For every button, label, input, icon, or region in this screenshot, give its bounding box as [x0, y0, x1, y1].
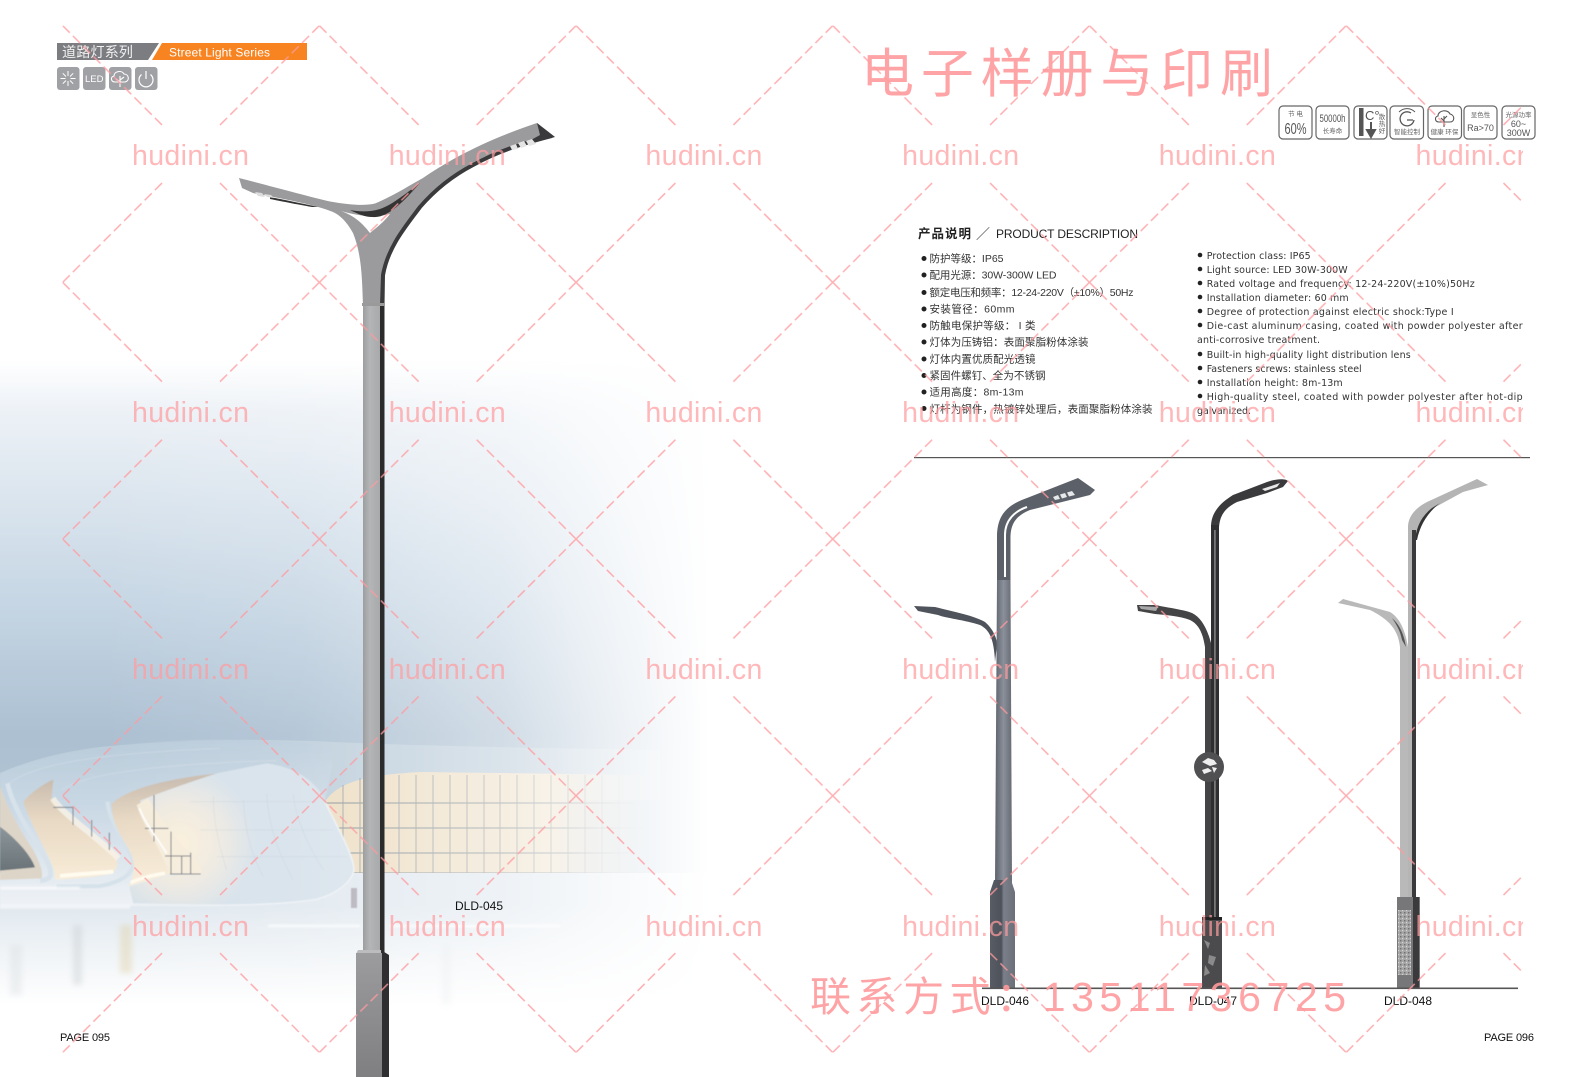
icon: energy saving 60%: 60%: [1284, 121, 1306, 138]
icon: smart control: [1390, 106, 1424, 139]
watermark text grid: hudini.cn: [645, 140, 762, 172]
icon: heat dissipation: 热: [1379, 119, 1386, 128]
wave A ribbon: [7, 783, 51, 881]
performance icons right: [1279, 106, 1535, 139]
English specifications list: Rated voltage and frequency: 12-24-220V(±10%)50Hz: [1207, 279, 1475, 290]
Chinese specifications list: 紧固件螺钉、全为不锈钢: [930, 369, 1046, 382]
watermark text grid: hudini.cn: [645, 654, 762, 686]
Chinese specifications list: 防触电保护等级： I 类: [930, 319, 1036, 332]
building mass: [0, 740, 354, 906]
side arm shadow: [1392, 618, 1406, 647]
English specifications list: High-quality steel, coated with powder polyester after hot-dip: [1207, 392, 1523, 403]
watermark text grid: hudini.cn: [1416, 911, 1532, 943]
warm glow on wave C: [129, 773, 273, 905]
product description heading: [918, 226, 1138, 242]
English specifications list: Degree of protection against electric shock:Type I: [1207, 307, 1454, 318]
watermark text grid: hudini.cn: [132, 654, 249, 686]
icon: power: [135, 67, 158, 90]
icon: healthy and green: [1428, 106, 1462, 139]
icon: heat dissipation: C°: [1365, 108, 1380, 123]
model labels: [455, 899, 1432, 1008]
watermark text grid: hudini.cn: [132, 140, 249, 172]
main arm and head: [997, 478, 1095, 600]
product description heading: ／: [976, 226, 990, 242]
icon: light source power: [1502, 106, 1535, 139]
model labels: DLD-046: [981, 994, 1029, 1008]
pole base: [356, 950, 389, 1077]
Chinese specifications list: 防护等级：IP65: [930, 252, 1004, 265]
main lamp DLD-045: [239, 123, 555, 1077]
panel lines: [190, 793, 347, 880]
watermark text grid: hudini.cn: [389, 654, 506, 686]
left cream column: [0, 785, 42, 880]
Chinese specifications list: 灯杆为钢件，热镀锌处理后，表面聚脂粉体涂装: [930, 402, 1153, 416]
main arm and head: [1211, 479, 1288, 600]
left cave: [0, 827, 35, 871]
icon: colour rendering: Ra>70: [1467, 123, 1494, 133]
icon: heat dissipation: 散: [1379, 112, 1386, 121]
English specifications list: Installation diameter: 60 mm: [1207, 293, 1349, 304]
watermark text grid: hudini.cn: [1159, 911, 1276, 943]
icon: light source power: 60~: [1511, 119, 1526, 129]
icon: energy saving 60%: 节 电: [1288, 109, 1303, 118]
icon: heat dissipation: 好: [1379, 126, 1386, 135]
white roof ribbons: [7, 748, 277, 790]
watermark text grid: hudini.cn: [645, 397, 762, 429]
watermark text grid: hudini.cn: [132, 397, 249, 429]
watermark text grid: hudini.cn: [902, 911, 1019, 943]
watermark text grid: hudini.cn: [1159, 140, 1276, 172]
icon: light burst: [57, 67, 80, 90]
English specifications list: galvanized.: [1197, 406, 1251, 417]
lamp head and arms: [239, 123, 555, 305]
Chinese specifications list: 配用光源：30W-300W LED: [930, 268, 1057, 282]
right fade: [100, 355, 760, 1015]
background photo: architecture fading into white: [0, 355, 760, 1015]
model labels: DLD-048: [1384, 994, 1432, 1008]
wave C edge: [133, 802, 354, 905]
page numbers: PAGE 096: [1484, 1032, 1534, 1044]
watermark contact: 联系方式：13511736725: [810, 974, 1346, 1020]
watermark text grid: hudini.cn: [902, 140, 1019, 172]
pole shaft: [362, 303, 385, 953]
icon: colour rendering: 显色性: [1471, 110, 1491, 119]
window strip A: [53, 798, 118, 858]
page numbers: [60, 1032, 1534, 1044]
watermark text grid: hudini.cn: [389, 397, 506, 429]
lamp DLD-046: [914, 478, 1095, 988]
side arm: [914, 606, 997, 662]
icon: LED: LED: [85, 74, 104, 85]
watermark text grid: hudini.cn: [1416, 654, 1532, 686]
wave B ribbon: [57, 802, 133, 887]
English specifications list: Installation height: 8m-13m: [1207, 378, 1343, 389]
watermark text grid: hudini.cn: [132, 911, 249, 943]
English specifications list: [1197, 251, 1523, 417]
watermark text grid: hudini.cn: [389, 140, 506, 172]
pole highlight: [1214, 530, 1216, 918]
product description heading: PRODUCT DESCRIPTION: [996, 227, 1138, 241]
header: grey Chinese tab: 道路灯系列: [62, 45, 133, 61]
building: [0, 740, 354, 906]
English specifications list: Built-in high-quality light distribution lens: [1207, 350, 1411, 361]
icon: 50000h lifetime: 50000h: [1320, 113, 1346, 125]
English specifications list: Die-cast aluminum casing, coated with powder polyester after: [1207, 321, 1523, 332]
cream recess A: [23, 779, 117, 879]
side arm: [1338, 599, 1408, 897]
model labels: DLD-047: [1189, 994, 1237, 1008]
wave C face: [129, 763, 354, 905]
light lines on floor: [0, 888, 560, 926]
icon: 50000h lifetime: 长寿命: [1323, 126, 1343, 135]
icon: heat dissipation: [1354, 106, 1387, 139]
side arm highlight: [1139, 606, 1158, 611]
base: [990, 880, 1015, 988]
glass facade: [326, 772, 650, 875]
icon: tree: [109, 67, 132, 90]
base: [1202, 917, 1222, 988]
main arm and head: [1408, 479, 1488, 540]
English specifications list: anti-corrosive treatment.: [1197, 335, 1320, 346]
base: [1397, 897, 1420, 988]
header: grey Chinese tab: [57, 43, 159, 61]
icon: colour rendering: [1464, 106, 1497, 139]
feature icons left: [57, 67, 158, 90]
icon: healthy and green: 健康 环保: [1431, 127, 1459, 136]
icon: smart control: 智能控制: [1394, 127, 1420, 136]
pole shaft: [995, 580, 1012, 885]
lamp DLD-048: [1338, 479, 1488, 988]
Chinese specifications list: [922, 252, 1153, 416]
floor glow A: [60, 872, 113, 876]
Chinese specifications list: 额定电压和频率：12-24-220V（±10%）50Hz: [930, 286, 1134, 299]
lamp DLD-047: [1137, 479, 1288, 988]
icon: light source power: 光源功率: [1506, 110, 1532, 119]
window strip B: [137, 798, 201, 875]
page numbers: PAGE 095: [60, 1032, 110, 1044]
icon: light source power: 300W: [1507, 128, 1531, 138]
watermark title: 电子样册与印刷: [861, 45, 1273, 104]
roof band: [0, 740, 660, 800]
header: orange English tab: [152, 43, 307, 60]
watermark text grid: hudini.cn: [1159, 654, 1276, 686]
watermark text grid: hudini.cn: [902, 654, 1019, 686]
watermark text grid: hudini.cn: [1416, 397, 1532, 429]
watermark text grid: hudini.cn: [902, 397, 1019, 429]
ground: [0, 873, 760, 1010]
watermark text grid: hudini.cn: [389, 911, 506, 943]
pole shaft: [1211, 525, 1219, 918]
product description heading: 产品说明: [918, 226, 971, 241]
icon: 50000h lifetime: [1316, 106, 1349, 139]
pole shaft: [1408, 530, 1416, 898]
English specifications list: Light source: LED 30W-300W: [1207, 265, 1348, 276]
model labels: DLD-045: [455, 899, 503, 913]
English specifications list: Fasteners screws: stainless steel: [1207, 364, 1362, 375]
cream recess B: [112, 773, 217, 886]
floor glow B: [131, 873, 165, 883]
watermark text grid: [132, 140, 1532, 943]
watermark text grid: hudini.cn: [1159, 397, 1276, 429]
Chinese specifications list: 安装管径：60mm: [930, 302, 1015, 316]
medallion: [1194, 752, 1224, 782]
side arm: [1137, 605, 1212, 918]
English specifications list: Protection class: IP65: [1207, 251, 1311, 262]
series header: [57, 43, 307, 61]
watermark text grid: hudini.cn: [645, 911, 762, 943]
blurred people: [10, 925, 451, 1005]
header: orange English tab: Street Light Series: [169, 46, 270, 60]
Chinese specifications list: 适用高度：8m-13m: [930, 386, 1024, 398]
icon: energy saving 60%: [1279, 106, 1312, 139]
Chinese specifications list: 灯体为压铸铝：表面聚脂粉体涂装: [930, 336, 1089, 348]
Chinese specifications list: 灯体内置优质配光透镜: [930, 352, 1036, 366]
watermark text grid: hudini.cn: [1416, 140, 1532, 172]
